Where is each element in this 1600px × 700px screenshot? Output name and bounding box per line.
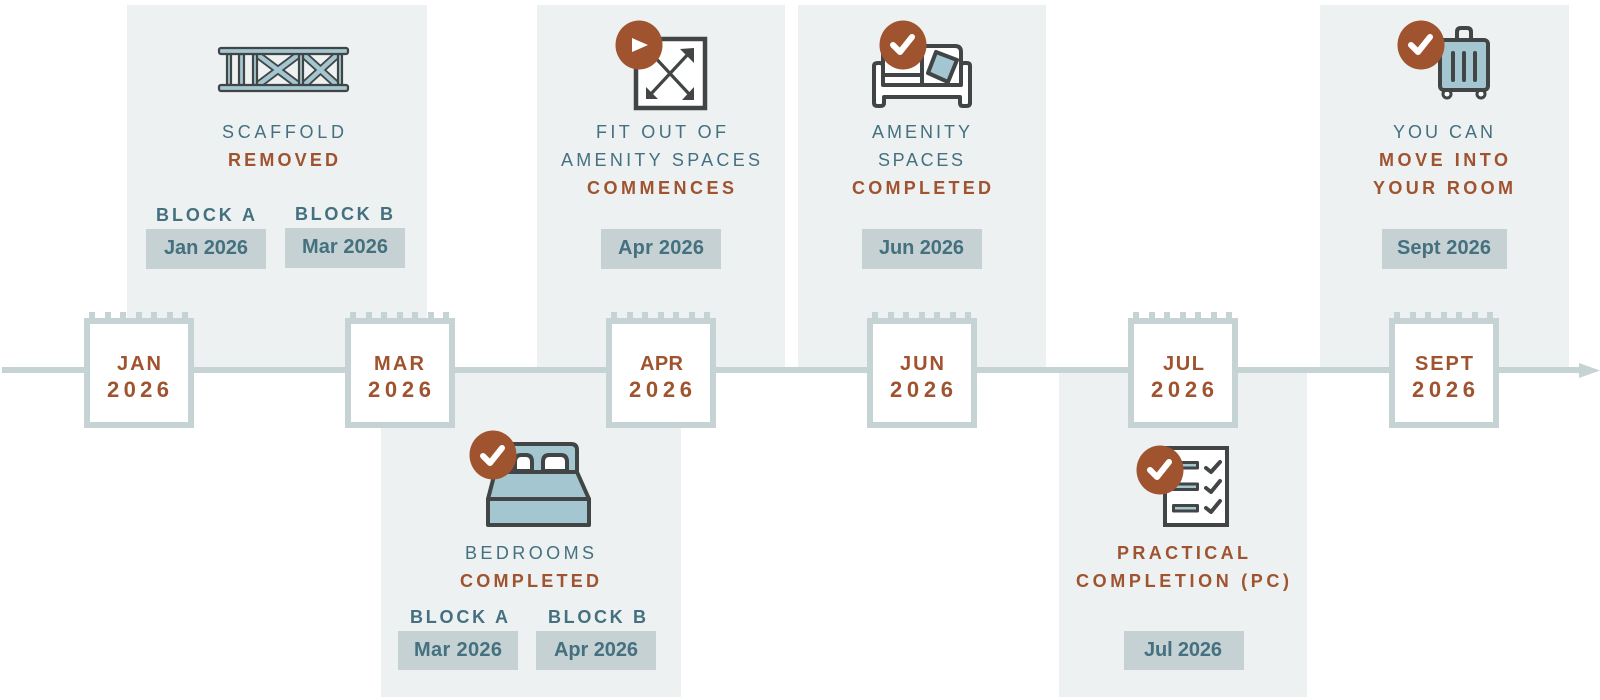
heading: fit out of amenity spaces commences: FIT OUT OF — [596, 122, 726, 142]
heading: amenity spaces completed: COMPLETED — [852, 178, 991, 198]
block A date: Mar 2026 — [414, 639, 502, 661]
heading: amenity spaces completed — [852, 122, 991, 198]
calendar: Mar 2026: MAR — [374, 353, 425, 375]
calendar: Jan 2026: JAN — [117, 353, 161, 375]
calendar: Jun 2026 — [870, 312, 974, 425]
heading: practical completion (PC): COMPLETION (PC) — [1076, 571, 1289, 591]
date: Jun 2026 — [862, 229, 982, 269]
block B date: BLOCK B — [548, 607, 646, 627]
calendar: Sept 2026: SEPT — [1415, 353, 1473, 375]
heading: scaffold removed — [222, 122, 344, 170]
calendar: Jul 2026: JUL — [1163, 353, 1204, 375]
date: Jul 2026: Jul 2026 — [1144, 639, 1222, 661]
block B date — [285, 204, 405, 268]
calendar: Sept 2026: 2026 — [1412, 377, 1475, 402]
heading: bedrooms completed: BEDROOMS — [465, 543, 594, 563]
heading: you can move into your room — [1373, 122, 1513, 198]
heading: fit out of amenity spaces commences — [561, 122, 760, 198]
calendar: Apr 2026: APR — [640, 353, 684, 375]
calendar: Jan 2026: 2026 — [107, 377, 169, 402]
block A date: BLOCK A — [410, 607, 508, 627]
heading: practical completion (PC): PRACTICAL — [1117, 543, 1248, 563]
heading: you can move into your room: MOVE INTO — [1379, 150, 1508, 170]
calendar: Mar 2026 — [348, 312, 452, 425]
panel: bedrooms completed — [381, 370, 681, 697]
arrow: timeline — [2, 363, 1600, 378]
icon: bed with check badge — [470, 430, 589, 525]
calendar: Jun 2026: JUN — [900, 353, 944, 375]
date: Sept 2026: Sept 2026 — [1397, 237, 1491, 259]
calendar: Jul 2026: 2026 — [1151, 377, 1214, 402]
calendar: Apr 2026 — [609, 312, 713, 425]
date: Jul 2026 — [1124, 631, 1244, 670]
block A date: BLOCK A — [156, 205, 255, 225]
panel: scaffold removed — [127, 5, 427, 370]
block A date — [398, 607, 518, 670]
block B date: Apr 2026 — [554, 639, 638, 661]
icon: suitcase with check badge — [1398, 20, 1488, 98]
heading: fit out of amenity spaces commences: COMMENCES — [587, 178, 734, 198]
icon: checklist with check badge — [1136, 446, 1227, 525]
icon: sofa with check badge — [874, 20, 970, 106]
panel: practical completion — [1059, 370, 1307, 697]
calendar: Apr 2026: 2026 — [629, 377, 692, 402]
heading: amenity spaces completed: SPACES — [878, 150, 963, 170]
block B date — [536, 607, 656, 670]
calendar: Jan 2026 — [87, 312, 191, 425]
heading: you can move into your room: YOU CAN — [1393, 122, 1493, 142]
calendar: Mar 2026: 2026 — [368, 377, 431, 402]
heading: fit out of amenity spaces commences: AMENITY SPACES — [561, 150, 760, 170]
panel: move into your room — [1320, 5, 1569, 370]
heading: scaffold removed: SCAFFOLD — [222, 122, 344, 142]
date: Apr 2026: Apr 2026 — [618, 237, 704, 259]
heading: bedrooms completed: COMPLETED — [460, 571, 599, 591]
block B date: Mar 2026 — [302, 236, 388, 258]
panel: fit out commences — [537, 5, 785, 370]
heading: scaffold removed: REMOVED — [228, 150, 338, 170]
icon: scaffold — [219, 48, 348, 91]
heading: practical completion (PC) — [1076, 543, 1289, 591]
date: Apr 2026 — [601, 229, 721, 269]
block A date: Jan 2026 — [164, 237, 248, 259]
calendar: Jul 2026 — [1131, 312, 1235, 425]
panel: amenity spaces completed — [798, 5, 1046, 370]
date: Jun 2026: Jun 2026 — [879, 237, 964, 259]
calendar: Sept 2026 — [1392, 312, 1496, 425]
calendar: Jun 2026: 2026 — [890, 377, 953, 402]
date: Sept 2026 — [1382, 229, 1507, 269]
block A date — [146, 205, 266, 269]
heading: amenity spaces completed: AMENITY — [872, 122, 970, 142]
heading: bedrooms completed — [460, 543, 599, 591]
block B date: BLOCK B — [295, 204, 393, 224]
icon: expand square with play badge — [616, 20, 705, 108]
heading: you can move into your room: YOUR ROOM — [1373, 178, 1513, 198]
